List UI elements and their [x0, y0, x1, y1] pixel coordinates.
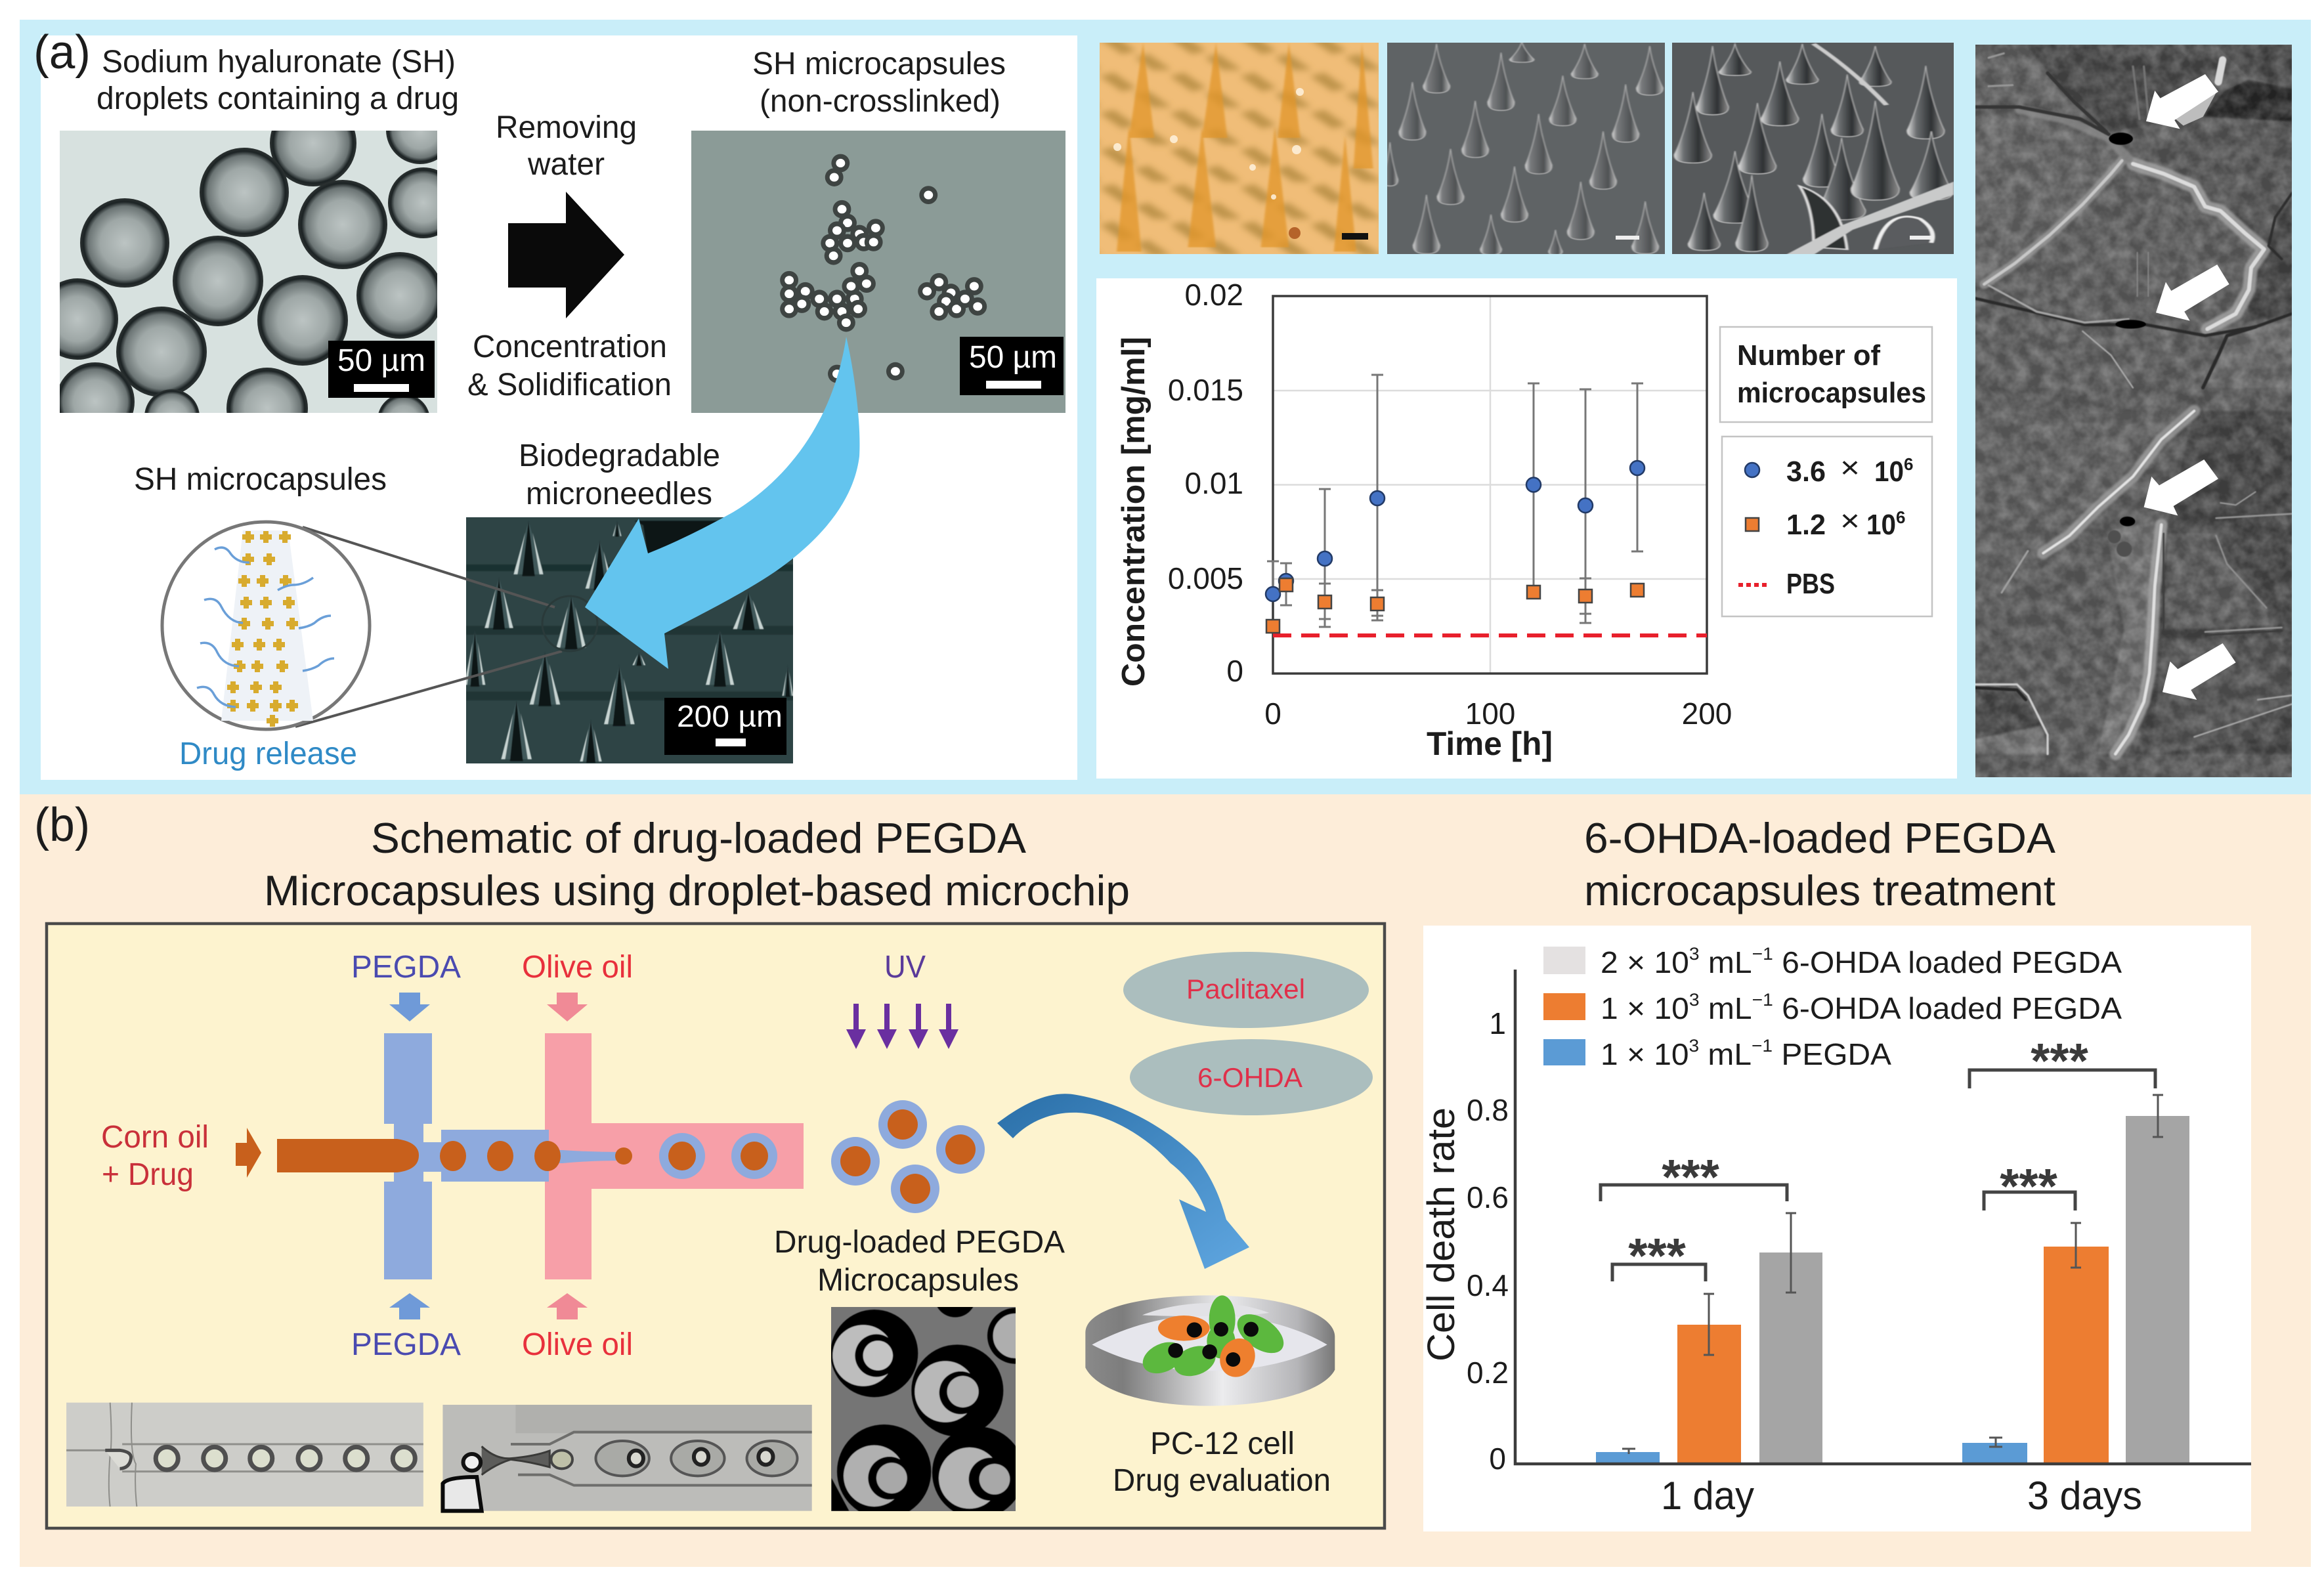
label: paclitaxel: Paclitaxel: [1186, 974, 1305, 1004]
corn oil rod: [277, 1139, 419, 1172]
PBS line: [1273, 633, 1707, 637]
upper half of skin SEM: [1975, 45, 2292, 388]
y axis tick labels: 0.005: [1168, 561, 1243, 595]
significance stars: [1628, 1033, 2089, 1283]
photo: orange microneedle array: [1100, 43, 1379, 254]
panel label a: (a): [33, 26, 91, 79]
photo: SEM intact microneedles: [1382, 41, 1665, 255]
x axis labels: [1661, 1474, 2142, 1518]
x axis tick labels: 200: [1682, 696, 1732, 731]
heading: sodium hyaluronate droplets: droplets containing a drug: [97, 81, 459, 116]
error bars: [1267, 375, 1643, 627]
legend: mL: [1700, 991, 1752, 1025]
arrow: white 4: [2163, 643, 2236, 700]
heading: SH microcapsules non-crosslinked: (non-crosslinked): [760, 84, 1001, 119]
scale bar: 50 um right: 50 µm: [969, 340, 1057, 375]
y axis tick labels: [1467, 1006, 1509, 1476]
texture: [1975, 45, 2292, 777]
micrograph: single emulsion channel: [66, 1403, 423, 1507]
legend box: [1722, 437, 1932, 616]
legend box: 3.6: [1786, 456, 1826, 488]
series: 3.6e6 microcapsules: [1266, 461, 1645, 601]
label: corn oil and drug: + Drug: [102, 1157, 194, 1192]
legend: mL: [1700, 945, 1752, 979]
legend box: ×: [1840, 503, 1860, 538]
label: removing water: water: [527, 147, 605, 182]
legend box: 1.2: [1786, 509, 1826, 541]
legend box: PBS: [1786, 568, 1835, 600]
panel: a background: [20, 20, 2311, 794]
legend: 6-OHDA loaded PEGDA: [1773, 991, 2122, 1025]
micrograph: microcapsules: [691, 131, 1065, 413]
legend: 2 × 10: [1601, 945, 1685, 979]
significance stars: ***: [2000, 1159, 2058, 1214]
significance stars: ***: [2031, 1033, 2089, 1088]
legend: 6-OHDA loaded PEGDA: [1773, 945, 2122, 979]
labels: PEGDA and olive oil top: Olive oil: [522, 950, 633, 985]
y axis tick labels: [1168, 278, 1243, 688]
arrow: white 3: [2144, 460, 2218, 515]
error bars: [1622, 1095, 2163, 1454]
panel: a microcapsule preparation: [33, 26, 1077, 780]
label: removing water: [496, 110, 637, 182]
scale bar: 50 um: [328, 341, 435, 398]
microchip channels: [277, 1033, 804, 1279]
label: PC-12 cell drug evaluation: PC-12 cell: [1150, 1426, 1295, 1461]
x axis labels: 3 days: [2027, 1474, 2142, 1518]
x axis title: Time [h]: [1427, 725, 1553, 762]
panel: concentration chart: [1096, 278, 1957, 779]
heading: schematic: [264, 814, 1130, 914]
heading: sodium hyaluronate droplets: Sodium hyaluronate (SH): [102, 45, 456, 79]
legend box: 10: [1874, 456, 1904, 488]
y axis tick labels: 0.02: [1184, 278, 1243, 312]
label: biodegradable microneedles: microneedles: [526, 477, 712, 511]
panel label b: (b): [34, 799, 90, 851]
arrow: corn oil inlet: [236, 1128, 261, 1178]
arrow: process: [508, 192, 624, 318]
y axis tick labels: 0.8: [1467, 1093, 1509, 1127]
icon: curved blue arrow: [585, 337, 859, 669]
scale bar: 50 um right: [960, 337, 1064, 395]
legend title box: [1720, 327, 1932, 422]
label: drug release: Drug release: [179, 737, 357, 771]
panel: droplet microchip schematic: [47, 924, 1385, 1528]
significance stars: ***: [1628, 1228, 1687, 1283]
label: concentration and solidification: [467, 330, 672, 402]
y axis tick labels: 0.015: [1168, 373, 1243, 407]
legend: [1543, 944, 2122, 1071]
arrows: inlet bottom: [389, 1293, 588, 1319]
label: biodegradable microneedles: [519, 439, 720, 511]
photo: SEM bent microneedles: [1672, 43, 1954, 255]
y axis title: Cell death rate: [1420, 1107, 1463, 1361]
label: PC-12 cell drug evaluation: Drug evaluation: [1113, 1463, 1331, 1498]
heading: schematic: Schematic of drug-loaded PEGDA: [371, 814, 1027, 862]
labels: PEGDA and olive oil bottom: [351, 1327, 633, 1362]
legend: mL: [1699, 1037, 1752, 1071]
zoom-in lines: [295, 527, 597, 727]
x axis tick labels: 0: [1264, 696, 1281, 731]
icon: magnified needle with drug release: [162, 522, 370, 729]
label: drug-loaded PEGDA microcapsules: Microcapsules: [817, 1263, 1019, 1298]
y axis tick labels: 1: [1489, 1006, 1506, 1040]
legend: 3: [1689, 944, 1700, 964]
legend: −1: [1752, 1036, 1773, 1056]
legend: 3: [1689, 1036, 1699, 1056]
legend: 1 × 10: [1601, 1037, 1685, 1071]
heading: 6-OHDA-loaded PEGDA treatment: [1584, 814, 2056, 914]
arrow: white 2: [2156, 265, 2229, 321]
y axis tick labels: 0.6: [1467, 1180, 1509, 1214]
y axis tick labels: 0.4: [1467, 1268, 1509, 1302]
label: drug-loaded PEGDA microcapsules: [774, 1225, 1065, 1298]
label: 6-OHDA: 6-OHDA: [1197, 1062, 1302, 1093]
panel: b background: [20, 794, 2311, 1567]
icon: free microcapsules: [831, 1100, 985, 1213]
heading: 6-OHDA-loaded PEGDA treatment: microcapsules treatment: [1584, 867, 2055, 914]
micrograph: microneedles: [464, 517, 794, 763]
label: UV: UV: [884, 950, 926, 985]
x axis tick labels: 100: [1465, 696, 1515, 731]
legend: −1: [1752, 990, 1773, 1010]
legend box: 10: [1866, 509, 1896, 541]
label: PC-12 cell drug evaluation: [1113, 1426, 1331, 1498]
icon: culture dish with cells: [1085, 1295, 1335, 1406]
label: concentration and solidification: Concentration: [473, 330, 667, 364]
legend box: 6: [1904, 454, 1913, 474]
legend box: 6: [1896, 507, 1905, 527]
plot frame: [1273, 296, 1707, 674]
heading: SH microcapsules non-crosslinked: SH microcapsules: [752, 47, 1006, 81]
double emulsion droplets in channel: [659, 1133, 777, 1179]
legend: PEGDA: [1773, 1037, 1891, 1071]
legend box: ×: [1840, 450, 1860, 484]
droplets in channel: [440, 1141, 632, 1171]
labels: PEGDA and olive oil bottom: Olive oil: [522, 1327, 633, 1362]
label: 6-OHDA: [1130, 1039, 1373, 1115]
labels: PEGDA and olive oil top: [351, 950, 633, 985]
significance brackets: [1601, 1070, 2155, 1281]
legend: −1: [1752, 944, 1773, 964]
label: paclitaxel: [1123, 952, 1369, 1028]
upper ridges: [1975, 53, 2292, 388]
significance stars: ***: [1662, 1149, 1720, 1205]
bars: 3 days: [1962, 1116, 2189, 1464]
panel: cell death bar chart: [1420, 926, 2251, 1531]
lower ridges: [1975, 411, 2292, 754]
legend: 3: [1689, 990, 1700, 1010]
labels: PEGDA and olive oil bottom: PEGDA: [351, 1327, 461, 1362]
heading: sodium hyaluronate droplets: [97, 45, 459, 116]
micrograph: PEGDA capsules: [830, 1275, 1041, 1518]
label: removing water: Removing: [496, 110, 637, 145]
heading: SH microcapsules non-crosslinked: [752, 47, 1006, 119]
x axis tick labels: [1264, 696, 1732, 731]
lower half of skin SEM: [1975, 411, 2292, 754]
legend title box: Number of: [1737, 339, 1880, 372]
y axis title: Concentration [mg/ml]: [1116, 337, 1151, 687]
label: SH microcapsules: SH microcapsules: [134, 462, 387, 497]
gridlines: [1273, 296, 1707, 674]
arrows: inlet top: [389, 993, 588, 1021]
arrow: curved blue to cells: [997, 1094, 1249, 1269]
heading: 6-OHDA-loaded PEGDA treatment: 6-OHDA-loaded PEGDA: [1584, 814, 2056, 862]
label: corn oil and drug: [101, 1120, 209, 1192]
arrows: UV: [846, 1004, 958, 1049]
labels: PEGDA and olive oil top: PEGDA: [351, 950, 461, 985]
scale bar: 200 um: [664, 698, 786, 755]
bars: 1 day: [1596, 1252, 1822, 1464]
axes: [1515, 970, 2251, 1464]
arrow: white 1: [2146, 74, 2218, 129]
y axis tick labels: 0: [1489, 1442, 1506, 1476]
legend title box: microcapsules: [1737, 377, 1926, 409]
x axis labels: 1 day: [1661, 1474, 1754, 1518]
micrograph: droplets: [60, 131, 437, 413]
label: concentration and solidification: & Solidification: [467, 368, 672, 402]
y axis tick labels: 0: [1226, 654, 1243, 688]
label: biodegradable microneedles: Biodegradable: [519, 439, 720, 473]
y axis tick labels: 0.2: [1467, 1356, 1509, 1390]
heading: schematic: Microcapsules using droplet-based microchip: [264, 867, 1130, 914]
series: 1.2e6 microcapsules: [1266, 578, 1644, 633]
micrograph: double emulsion channel: [442, 1405, 812, 1511]
y axis tick labels: 0.01: [1184, 466, 1243, 500]
label: corn oil and drug: Corn oil: [101, 1120, 209, 1155]
legend: 1 × 10: [1601, 991, 1685, 1025]
photo: SEM of skin surface with arrows: [1975, 45, 2292, 777]
scale bar: 50 um: 50 µm: [337, 343, 425, 378]
scale bar: 200 um: 200 µm: [677, 699, 783, 733]
label: drug-loaded PEGDA microcapsules: Drug-loaded PEGDA: [774, 1225, 1065, 1260]
